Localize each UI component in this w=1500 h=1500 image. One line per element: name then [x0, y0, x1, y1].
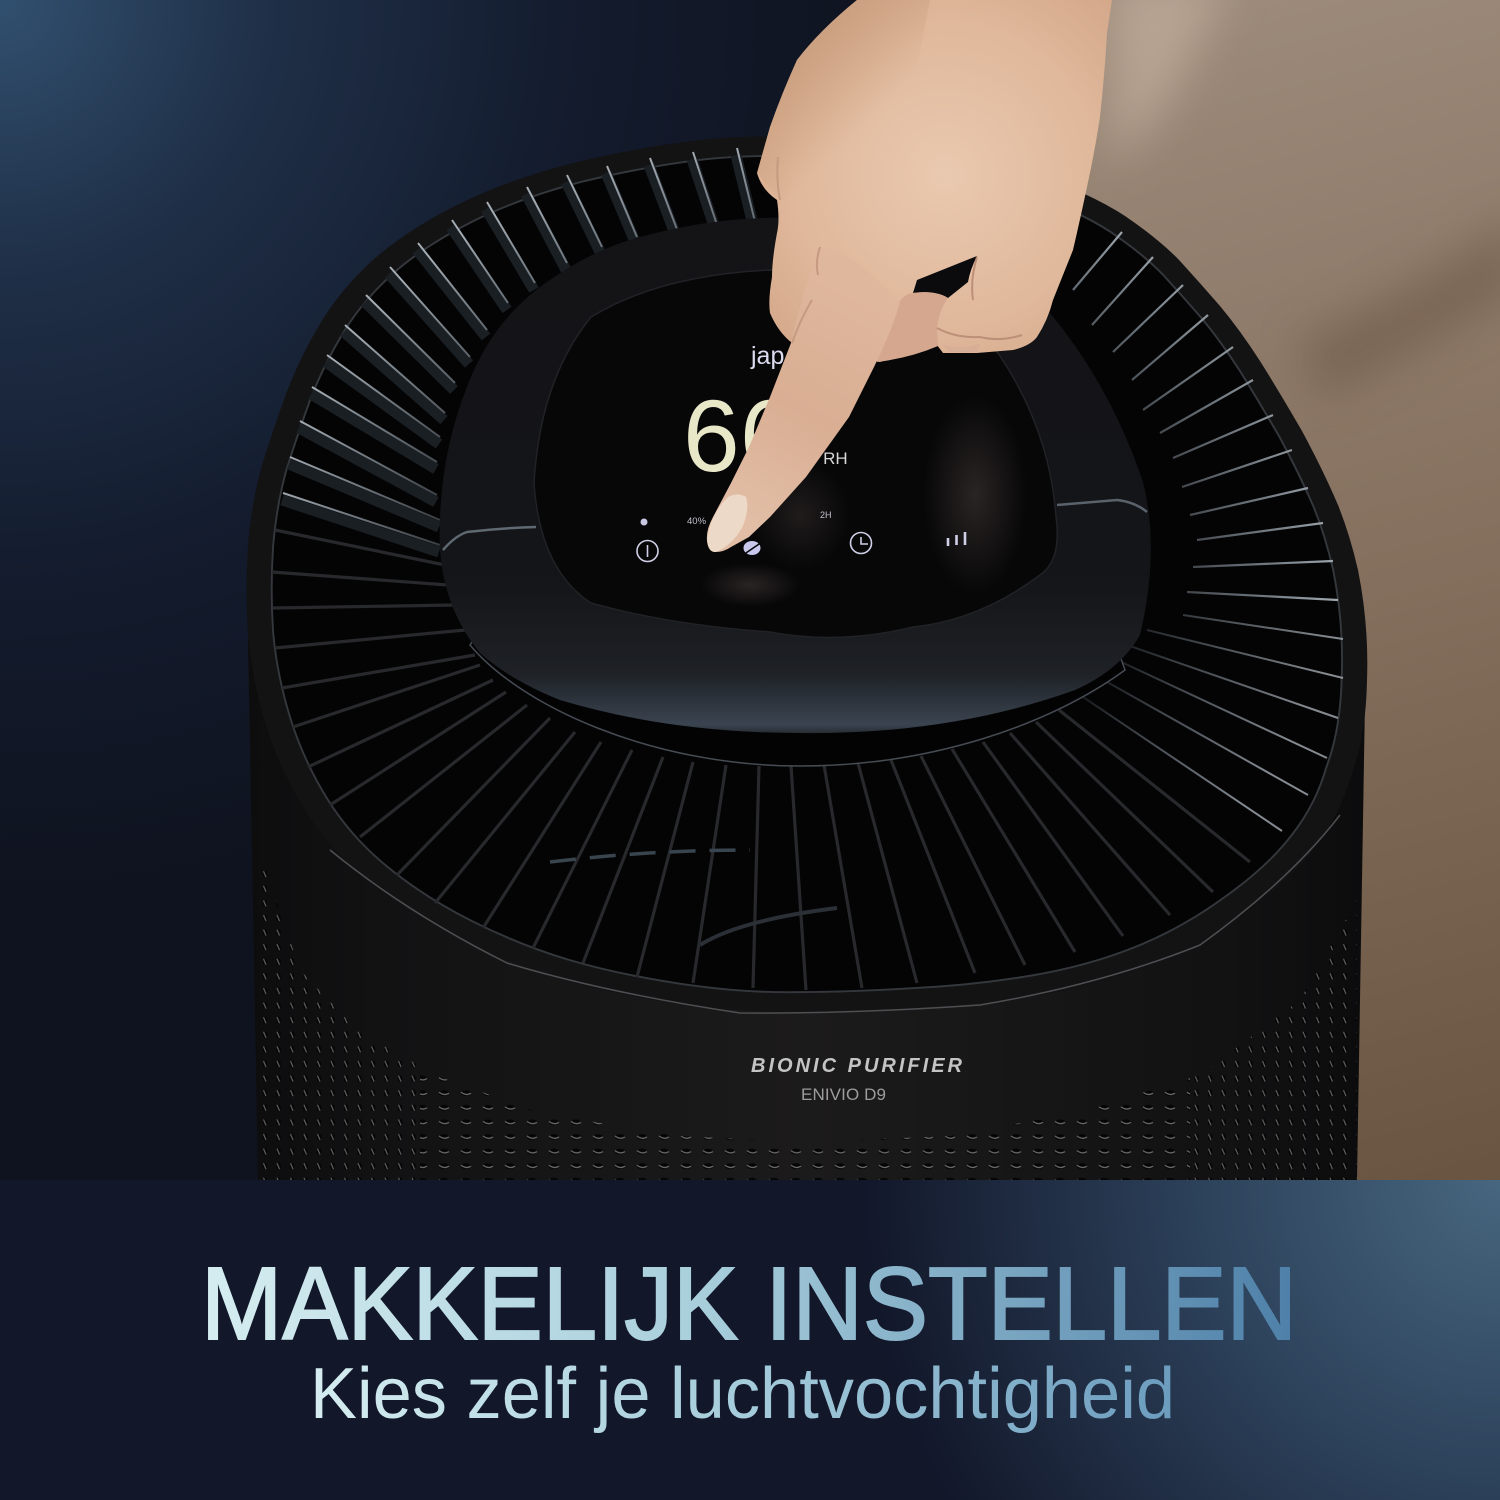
- background: wood light patch near wrist: [1110, 0, 1230, 170]
- back of hand: [757, 0, 1112, 362]
- product name: BIONIC PURIFIER: [751, 1055, 963, 1077]
- bottom text band: [0, 1180, 1500, 1500]
- icon: power: [637, 540, 658, 562]
- brand logo: jap: [750, 342, 784, 370]
- panel reflection lower: [700, 563, 800, 607]
- RH label: % RH: [798, 449, 848, 468]
- upper right fins: [1073, 232, 1338, 600]
- curled fingernail: [943, 344, 980, 352]
- humidity digits: 66: [683, 379, 796, 493]
- upper left fin faces: [282, 155, 755, 552]
- rim lower highlight: [330, 815, 1340, 1013]
- upper left fin edges: [283, 148, 756, 545]
- hand pressing the panel: [707, 0, 1112, 552]
- 40 percent label: 40%: [687, 516, 707, 527]
- perforations right: [1194, 900, 1357, 1180]
- 2H label: 2H: [820, 510, 832, 520]
- gap between fingers: [913, 256, 977, 298]
- title: MAKKELIJK INSTELLEN: [201, 1246, 1297, 1361]
- body perforations: [258, 860, 1357, 1180]
- icon: fan speed: [948, 532, 965, 546]
- panel reflection right: [923, 395, 1027, 595]
- lower right fins: [1080, 615, 1343, 831]
- light glints in lower louvers: [550, 850, 750, 862]
- cap seam left: [443, 527, 536, 550]
- perforations left: [258, 860, 420, 1180]
- indicator dot: [640, 518, 648, 526]
- perforations centre: [420, 1066, 1190, 1180]
- curled finger creases: [937, 257, 1022, 339]
- louver well: [272, 156, 1342, 992]
- subtitle: Kies zelf je luchtvochtigheid: [310, 1354, 1175, 1434]
- inner blade glint: [700, 908, 837, 945]
- thumb: [877, 292, 948, 362]
- icon: timer: [850, 532, 872, 554]
- lower fins: [272, 530, 1250, 990]
- fingernail: [707, 494, 747, 552]
- index finger: [707, 247, 900, 552]
- control cap: [440, 218, 1151, 733]
- background: dark blue gradient: [0, 0, 1500, 1180]
- purifier body: [248, 640, 1365, 1180]
- top rim: [246, 136, 1367, 1012]
- display panel: [534, 270, 1057, 637]
- background: wooden surface: [1080, 0, 1500, 1180]
- cap seam right: [1057, 500, 1147, 512]
- dark inner throat: [470, 600, 1125, 766]
- tan shading on knuckle side: [757, 0, 930, 200]
- model name: ENIVIO D9: [801, 1085, 886, 1104]
- background: wood grain streak: [1300, 215, 1500, 400]
- knuckle creases: [777, 157, 820, 343]
- air purifier: [246, 136, 1367, 1180]
- panel reflection centre: [750, 460, 850, 570]
- icon: mode: [743, 541, 762, 555]
